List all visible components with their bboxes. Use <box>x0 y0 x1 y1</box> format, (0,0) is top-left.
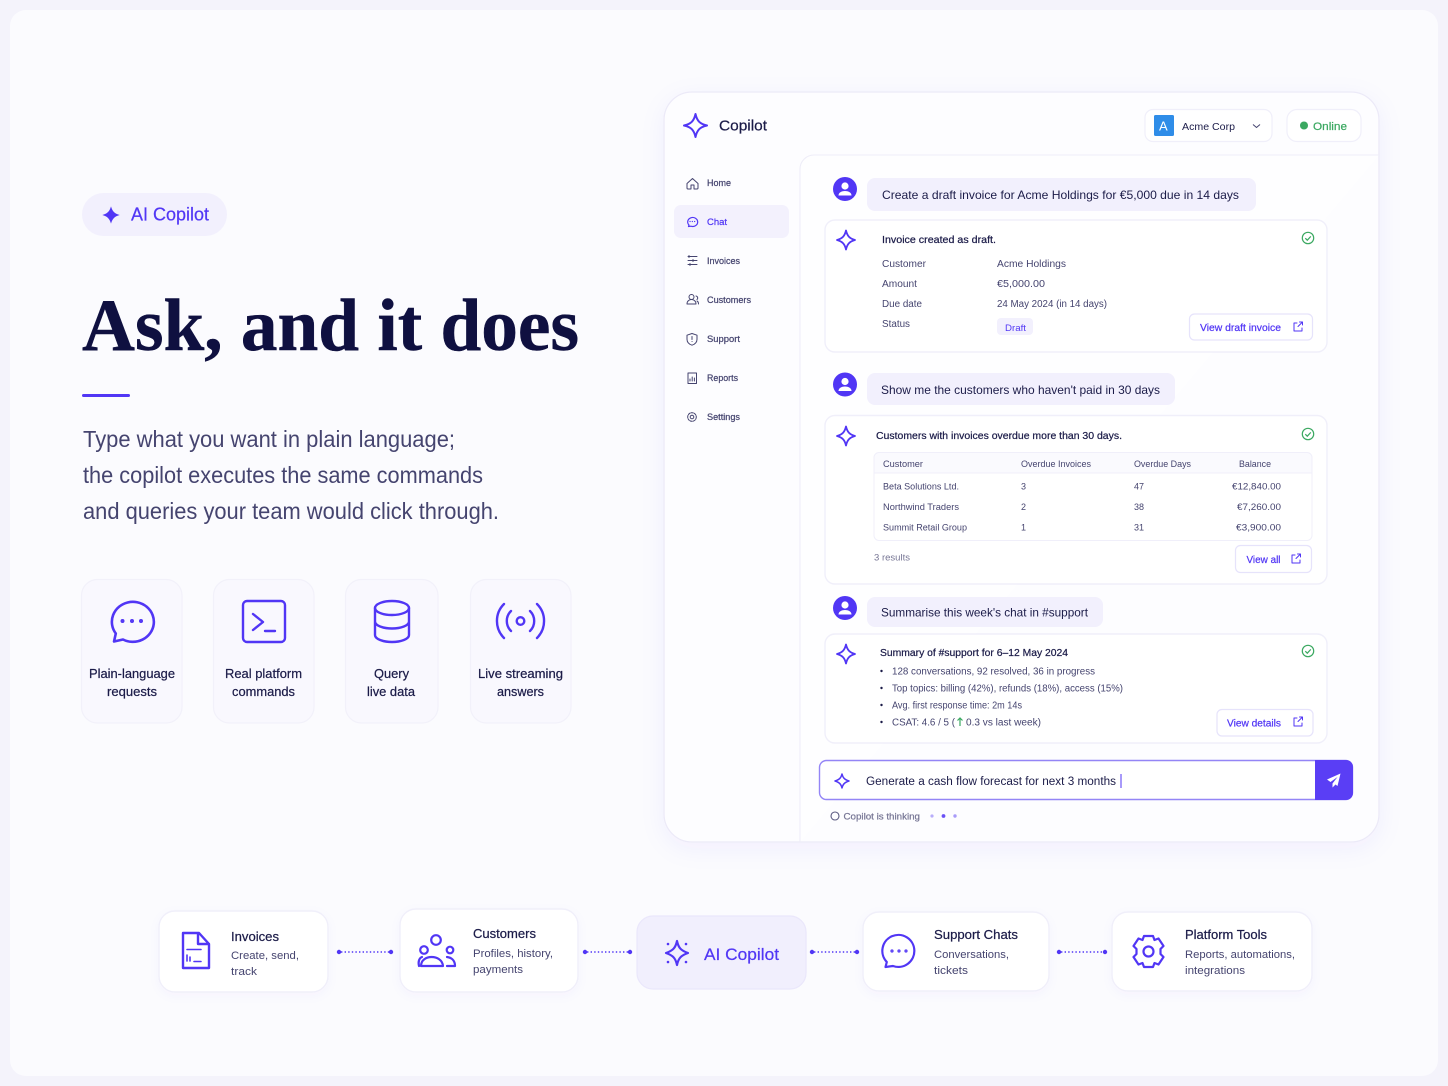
user message <box>867 178 1256 211</box>
results table: 47 <box>1134 482 1144 492</box>
nav: home: Home <box>707 178 731 188</box>
results table: Customer <box>883 459 923 469</box>
node: customers <box>400 909 578 992</box>
node: invoices: track <box>231 966 258 978</box>
response card: overdue customers: Customers with invoices overdue more than 30 days. <box>876 431 1122 442</box>
results table: Balance <box>1239 459 1271 469</box>
badge: AI Copilot: AI Copilot <box>131 204 209 224</box>
node: AI Copilot hub <box>637 916 806 989</box>
results table: €3,900.00 <box>1236 522 1281 532</box>
response card: support summary: Summary of #support for 6–12 May 2024 <box>880 648 1068 659</box>
description text <box>83 426 499 524</box>
icon: copilot star <box>684 114 707 137</box>
user avatar <box>833 372 857 396</box>
status: online: Online <box>1313 121 1347 133</box>
connector <box>337 950 393 954</box>
node: invoices: Invoices <box>231 930 279 944</box>
nav: chat: Chat <box>707 217 728 227</box>
conversation 3 <box>825 596 1327 743</box>
thinking status: Copilot is thinking <box>844 812 920 822</box>
panel: copilot app window <box>664 92 1379 842</box>
company selector: A <box>1159 118 1168 134</box>
feature cards <box>82 580 571 723</box>
summary bullets: 0.3 vs last week) <box>966 718 1041 728</box>
node: invoices <box>159 911 328 992</box>
node: support chats: Conversations, <box>934 949 1009 961</box>
node: invoices: Create, send, <box>231 950 299 962</box>
response card: invoice: Amount <box>882 279 917 290</box>
icon: chat bubble <box>112 602 154 642</box>
active nav highlight <box>674 205 789 238</box>
node: platform tools <box>1112 912 1312 991</box>
node: AI Copilot hub: AI Copilot <box>704 945 779 964</box>
summary bullets: Avg. first response time: 2m 14s <box>892 700 1022 712</box>
description text: the copilot executes the same commands <box>83 462 483 488</box>
node: support chats <box>863 912 1049 991</box>
icon: success check <box>1302 645 1314 657</box>
icon: gear <box>1134 936 1164 967</box>
user avatar <box>833 596 857 620</box>
connector <box>1057 950 1107 954</box>
send button <box>1315 760 1353 800</box>
results table: 2 <box>1021 502 1026 512</box>
nav: invoices <box>688 256 740 266</box>
response card: overdue customers <box>825 416 1327 584</box>
description text: Type what you want in plain language; <box>83 426 455 452</box>
button: view details: View details <box>1227 718 1281 730</box>
results table: 38 <box>1134 502 1144 512</box>
badge: AI Copilot <box>82 193 227 236</box>
icon: people <box>419 935 455 966</box>
node: platform tools: Reports, automations, <box>1185 949 1295 961</box>
icon: success check <box>1302 428 1314 440</box>
button: view draft invoice <box>1190 314 1312 340</box>
results table: 31 <box>1134 522 1144 532</box>
node: platform tools: integrations <box>1185 965 1246 977</box>
feature: plain-language requests <box>82 580 182 723</box>
connector <box>583 950 632 954</box>
accent rule <box>82 394 130 397</box>
status badge: Draft <box>1005 323 1026 334</box>
results table: 3 <box>1021 482 1026 492</box>
nav: invoices: Invoices <box>707 256 740 266</box>
response card: support summary <box>825 634 1327 743</box>
feature: plain-language requests: requests <box>107 684 157 699</box>
icon: terminal <box>243 601 285 642</box>
summary bullets: CSAT: 4.6 / 5 ( <box>892 718 956 728</box>
response card: invoice: 24 May 2024 (in 14 days) <box>997 299 1107 310</box>
description text: and queries your team would click through. <box>83 498 499 524</box>
response card: invoice: Invoice created as draft. <box>882 235 996 246</box>
title: Ask, and it does <box>82 285 579 367</box>
node: customers: Profiles, history, <box>473 948 553 960</box>
feature: query live data: Query <box>374 666 409 681</box>
results table: €12,840.00 <box>1232 482 1281 492</box>
icon: success check <box>1302 232 1314 244</box>
user message: Show me the customers who haven't paid in 30 days <box>881 383 1160 397</box>
conversation 2 <box>825 372 1327 584</box>
response card: overdue customers: 3 results <box>874 552 911 562</box>
node: support chats: Support Chats <box>934 928 1018 942</box>
company selector <box>1145 110 1272 142</box>
conversation 1 <box>825 177 1327 352</box>
results table: Beta Solutions Ltd. <box>883 482 959 492</box>
summary bullets: Top topics: billing (42%), refunds (18%), access (15%) <box>892 684 1123 694</box>
icon: database <box>375 601 409 642</box>
nav: chat <box>688 217 728 227</box>
icon: broadcast <box>497 604 544 638</box>
results table: Overdue Invoices <box>1021 459 1091 469</box>
results table: Overdue Days <box>1134 459 1191 469</box>
app header <box>684 110 1361 142</box>
button: view details <box>1217 710 1313 736</box>
response card: invoice: Customer <box>882 259 927 270</box>
nav: support <box>687 334 741 345</box>
icon: document <box>183 933 209 968</box>
main content area <box>800 155 1379 842</box>
node: customers: Customers <box>473 927 536 941</box>
sidebar navigation <box>674 178 789 422</box>
icon: chat bubble <box>882 935 914 967</box>
feature: query live data <box>346 580 438 723</box>
company selector: Acme Corp <box>1182 121 1235 133</box>
nav: reports <box>688 373 738 384</box>
nav: reports: Reports <box>707 373 738 383</box>
feature: live streaming answers: answers <box>497 684 544 699</box>
results table: Northwind Traders <box>883 502 960 512</box>
thinking status <box>831 812 957 822</box>
nav: customers: Customers <box>707 295 752 305</box>
nav: customers <box>687 294 752 305</box>
button: view all: View all <box>1246 555 1280 566</box>
feature: live streaming answers: Live streaming <box>478 666 563 681</box>
results table: €7,260.00 <box>1237 502 1281 512</box>
feature: real platform commands: commands <box>232 684 295 699</box>
feature: query live data: live data <box>367 684 416 699</box>
icon: sparkle star <box>666 941 688 965</box>
results table <box>874 452 1312 540</box>
user message <box>867 373 1175 405</box>
response card: invoice: €5,000.00 <box>997 279 1045 290</box>
node: support chats: tickets <box>934 965 969 977</box>
user message <box>867 597 1103 627</box>
node: customers: payments <box>473 964 524 976</box>
chat input: Generate a cash flow forecast for next 3 months <box>866 776 1116 788</box>
results table: Summit Retail Group <box>883 522 967 532</box>
feature: plain-language requests: Plain-language <box>89 666 175 681</box>
nav: home <box>687 178 731 189</box>
node: platform tools: Platform Tools <box>1185 928 1267 942</box>
app header: Copilot <box>719 118 768 134</box>
bottom integration flow <box>159 909 1312 992</box>
nav: settings <box>688 412 740 422</box>
summary bullets <box>880 666 1123 728</box>
response card: invoice: Status <box>882 319 910 330</box>
user message: Summarise this week's chat in #support <box>881 606 1089 620</box>
response card: invoice: Acme Holdings <box>997 259 1066 270</box>
connector <box>810 950 859 954</box>
results table: 1 <box>1021 522 1026 532</box>
chat input <box>820 760 1353 800</box>
status: online <box>1287 110 1361 142</box>
nav: settings: Settings <box>707 412 740 422</box>
status badge <box>997 318 1033 335</box>
user avatar <box>833 177 857 201</box>
feature: real platform commands <box>214 580 314 723</box>
user message: Create a draft invoice for Acme Holdings for €5,000 due in 14 days <box>882 188 1239 202</box>
left hero column <box>82 193 579 723</box>
response card: invoice <box>825 220 1327 352</box>
summary bullets: 128 conversations, 92 resolved, 36 in progress <box>892 666 1095 678</box>
response card: invoice: Due date <box>882 299 922 310</box>
nav: support: Support <box>707 334 741 344</box>
button: view draft invoice: View draft invoice <box>1200 323 1281 334</box>
button: view all <box>1236 546 1312 572</box>
feature: real platform commands: Real platform <box>225 666 302 681</box>
feature: live streaming answers <box>470 580 571 723</box>
